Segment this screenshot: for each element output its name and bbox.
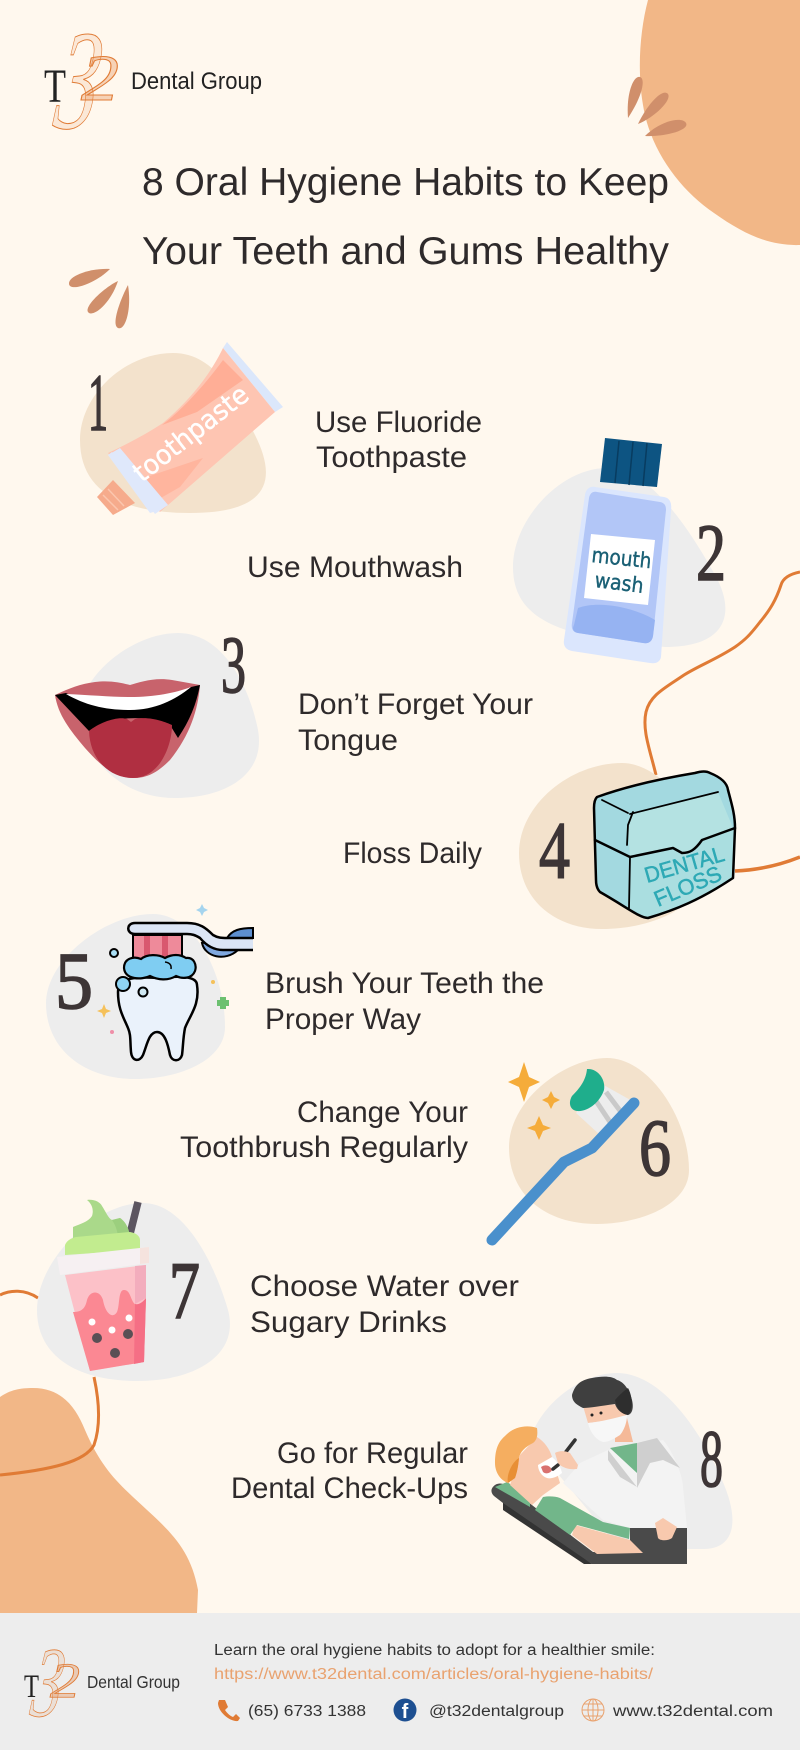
number 7: 7 bbox=[169, 1245, 200, 1336]
blob 8 bbox=[530, 1373, 732, 1549]
footer text: Learn the oral hygiene habits to adopt for a healthier smile: bbox=[214, 1642, 655, 1659]
label 3 bbox=[298, 688, 533, 757]
blob 3 bbox=[80, 633, 259, 798]
blob 1 bbox=[80, 353, 266, 513]
habit 8: dental check-ups bbox=[231, 1373, 732, 1564]
habit 2: mouthwash bbox=[247, 438, 726, 663]
label 6: Toothbrush Regularly bbox=[180, 1131, 468, 1164]
habit 5: brushing bbox=[46, 904, 544, 1079]
icon: dental floss box: FLOSS bbox=[650, 861, 725, 912]
title bbox=[142, 161, 669, 273]
habit 6: change toothbrush bbox=[180, 1058, 689, 1240]
icon: mouthwash bottle: wash bbox=[593, 568, 645, 598]
number 6: 6 bbox=[639, 1102, 671, 1193]
number 2: 2 bbox=[696, 507, 726, 598]
label 6 bbox=[180, 1096, 468, 1164]
icon: dental floss box bbox=[594, 772, 735, 918]
logo: T32 Dental Group: 3 bbox=[47, 2, 112, 159]
logo: T32 Dental Group bbox=[44, 2, 262, 159]
label 5: Proper Way bbox=[265, 1003, 421, 1036]
footer logo bbox=[24, 1626, 180, 1738]
label 1 bbox=[315, 406, 482, 474]
label 8 bbox=[231, 1437, 468, 1505]
blob 5 bbox=[46, 914, 225, 1079]
title: Your Teeth and Gums Healthy bbox=[142, 230, 669, 273]
social handle: @t32dentalgroup bbox=[429, 1703, 564, 1720]
icon: mouthwash bottle bbox=[564, 438, 671, 663]
habit 4: floss bbox=[343, 763, 735, 929]
label 7: Sugary Drinks bbox=[250, 1306, 447, 1339]
icon: globe bbox=[582, 1699, 604, 1721]
blob 6 bbox=[509, 1058, 689, 1224]
floss line: lower left bbox=[0, 1291, 99, 1475]
title: 8 Oral Hygiene Habits to Keep bbox=[142, 161, 669, 204]
website: www.t32dental.com bbox=[612, 1703, 773, 1720]
floss line: upper right bbox=[645, 572, 800, 775]
label 5 bbox=[265, 967, 544, 1036]
footer logo: 2 bbox=[50, 1652, 80, 1708]
footer link: https://www.t32dental.com/articles/oral-hygiene-habits/ bbox=[214, 1666, 654, 1683]
label 4: Floss Daily bbox=[343, 837, 482, 870]
blob 2 bbox=[513, 468, 725, 647]
label 6: Change Your bbox=[297, 1096, 468, 1129]
icon: mouth and tongue bbox=[55, 679, 200, 778]
icon: toothpaste tube: toothpaste bbox=[127, 379, 255, 489]
icon: toothbrush with paste bbox=[492, 1062, 634, 1240]
number 5: 5 bbox=[55, 935, 93, 1026]
footer bbox=[0, 1613, 800, 1750]
label 1: Use Fluoride bbox=[315, 406, 482, 439]
icon: toothpaste tube bbox=[97, 342, 283, 515]
footer logo: 3 bbox=[25, 1626, 71, 1738]
patient bbox=[572, 1525, 643, 1554]
icon: dental floss box: DENTAL bbox=[641, 841, 727, 888]
footer band bbox=[0, 1613, 800, 1750]
logo: T32 Dental Group: Dental Group bbox=[131, 68, 262, 95]
icon: bubble tea drink bbox=[57, 1200, 149, 1371]
number 8: 8 bbox=[700, 1413, 723, 1504]
habit 1: fluoride toothpaste bbox=[80, 342, 482, 515]
number 4: 4 bbox=[539, 805, 570, 896]
blob: top-right orange bbox=[640, 0, 800, 245]
icon: facebook bbox=[394, 1698, 416, 1723]
floss line: right of box bbox=[735, 857, 800, 871]
icon: facebook: f bbox=[402, 1701, 409, 1723]
icon: dentist and patient bbox=[491, 1377, 687, 1564]
habit 3: tongue bbox=[55, 619, 533, 798]
label 3: Don’t Forget Your bbox=[298, 688, 533, 721]
footer logo: Dental Group bbox=[87, 1672, 180, 1692]
petals: left accent bbox=[69, 269, 129, 328]
habit 7: water over sugary drinks bbox=[37, 1200, 519, 1381]
habit 1: fluoride toothpaste: 1 bbox=[88, 357, 108, 448]
blob: bottom-left orange bbox=[0, 1388, 198, 1613]
dental chair bbox=[491, 1484, 687, 1564]
label 1: Toothpaste bbox=[316, 441, 467, 474]
phone number: (65) 6733 1388 bbox=[248, 1703, 366, 1720]
icon: toothbrush and tooth bbox=[97, 904, 253, 1060]
logo: T32 Dental Group: 2 bbox=[81, 42, 119, 115]
logo: T32 Dental Group: T bbox=[44, 60, 66, 113]
label 8: Go for Regular bbox=[277, 1437, 468, 1470]
label 7: Choose Water over bbox=[250, 1270, 519, 1303]
petals: top-right accent bbox=[628, 77, 686, 136]
dentist coat bbox=[563, 1440, 687, 1528]
icon: mouthwash bottle: mouth bbox=[590, 543, 653, 573]
footer logo: T bbox=[24, 1669, 39, 1705]
label 8: Dental Check-Ups bbox=[231, 1472, 468, 1505]
label 5: Brush Your Teeth the bbox=[265, 967, 544, 1000]
blob 4 bbox=[519, 763, 708, 929]
label 3: Tongue bbox=[298, 724, 398, 757]
number 3: 3 bbox=[221, 619, 246, 710]
blob 7 bbox=[37, 1203, 230, 1381]
label 2: Use Mouthwash bbox=[247, 551, 463, 584]
label 7 bbox=[250, 1270, 519, 1339]
icon: phone bbox=[218, 1700, 240, 1721]
